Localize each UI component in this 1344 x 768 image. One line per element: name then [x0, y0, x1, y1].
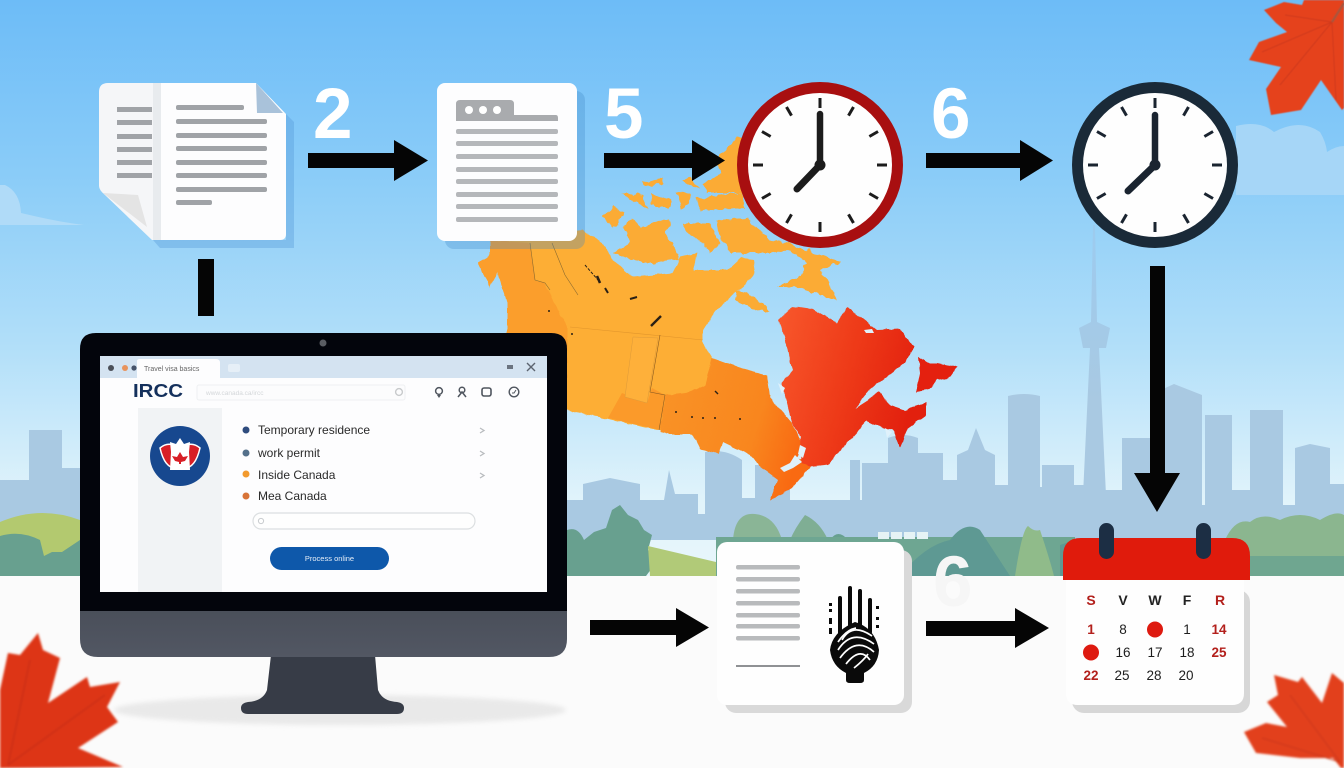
Canada emblem: [150, 426, 210, 486]
clock: navy rim: [1072, 82, 1238, 248]
arrow: biometrics to calendar: [926, 608, 1049, 648]
monitor shadow: [114, 695, 566, 725]
search box: [253, 513, 475, 529]
map: Quebec and Atlantic provinces: [778, 306, 926, 466]
calendar weekdays: R: [1215, 592, 1225, 608]
maple leaf: bottom left: [0, 633, 123, 768]
trees and hills: [0, 505, 1344, 576]
arrow: documents to form: [308, 140, 428, 181]
icon: fingerprint hand: [829, 586, 879, 683]
menu list: Temporary residence: [258, 423, 370, 437]
browser screen: Travel visa basics: [144, 366, 200, 373]
calendar dates: 28: [1146, 668, 1162, 683]
calendar dates: 18: [1179, 645, 1195, 660]
menu list: [242, 423, 484, 503]
arrow: monitor to biometrics: [590, 608, 709, 647]
monitor camera: [320, 340, 326, 346]
calendar dates: 25: [1114, 668, 1130, 683]
city skyline: [0, 225, 1344, 540]
calendar weekdays: W: [1148, 592, 1162, 608]
cloud: right: [1236, 124, 1344, 195]
computer monitor with IRCC site: [80, 333, 567, 657]
calendar dates: 16: [1115, 645, 1131, 660]
map: Saskatchewan: [625, 337, 658, 403]
calendar weekdays: [1086, 592, 1225, 608]
document icon: web form: [437, 83, 585, 249]
map: British Columbia: [478, 240, 567, 410]
maple leaf: bottom right: [1244, 673, 1344, 768]
document icon: stacked pages: [99, 83, 294, 248]
calendar weekdays: S: [1086, 592, 1096, 608]
menu list: Inside Canada: [258, 468, 336, 482]
calendar dates: 1: [1087, 622, 1095, 637]
biometrics card: [717, 542, 912, 713]
calendar dates: 1: [1183, 622, 1191, 637]
calendar weekdays: F: [1183, 592, 1192, 608]
calendar dates: [1083, 622, 1227, 683]
calendar dates: 20: [1178, 668, 1194, 683]
cloud: left: [0, 185, 84, 225]
address bar: www.canada.ca/ircc: [205, 390, 264, 397]
submit button: [270, 547, 389, 570]
map: province borders and lakes: [530, 243, 703, 430]
map: western and central provinces: [478, 230, 770, 430]
menu list: Mea Canada: [258, 489, 327, 503]
calendar weekdays: V: [1118, 592, 1128, 608]
arrow: form to first clock: [604, 140, 725, 181]
map: Ontario: [660, 358, 814, 501]
calendar dates: 17: [1147, 645, 1163, 660]
maple leaf: top right: [1249, 0, 1344, 115]
step number 6 (top): 6: [931, 75, 970, 154]
step number 6 (bottom, faint): 6: [933, 543, 972, 622]
IRCC wordmark: IRCC: [133, 381, 183, 401]
calendar dates: 25: [1211, 645, 1227, 660]
ground: [0, 576, 1344, 768]
calendar dates: 14: [1211, 622, 1227, 637]
calendar dates: 8: [1119, 622, 1127, 637]
arrow: first clock to second clock: [926, 140, 1053, 181]
clock: red rim: [737, 82, 903, 248]
map: Arctic islands: [602, 137, 840, 312]
sidebar: [138, 408, 222, 592]
map of Canada: [478, 137, 958, 501]
step number 2: 2: [313, 75, 352, 154]
calendar dates: 22: [1083, 668, 1099, 683]
menu list: work permit: [257, 446, 321, 460]
connector: documents down to monitor: [198, 259, 214, 316]
map: Manitoba: [608, 388, 665, 430]
address bar: [197, 385, 519, 400]
step number 5: 5: [604, 75, 644, 154]
arrow: second clock down to calendar: [1134, 266, 1180, 512]
sky background: [0, 0, 1344, 580]
map: Newfoundland: [916, 357, 958, 392]
calendar: [1063, 523, 1250, 713]
monitor stand: [241, 655, 404, 714]
browser screen: [100, 356, 547, 592]
submit button: Process online: [305, 554, 354, 563]
